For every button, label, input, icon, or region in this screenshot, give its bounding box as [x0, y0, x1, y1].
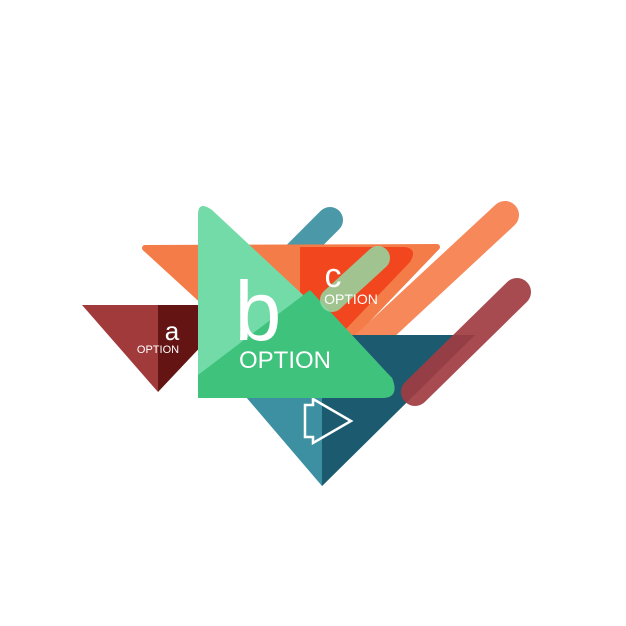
light green pill: [332, 258, 378, 300]
panel: green triangle option b: OPTION: [239, 347, 331, 374]
panel: teal triangle arrow: [193, 335, 475, 486]
label b: b: [235, 264, 281, 358]
panel: maroon triangle option a: OPTION: [137, 344, 179, 356]
icon: arrow: [305, 399, 351, 443]
panel: green triangle option b: [198, 206, 394, 398]
panel: maroon triangle option a: [82, 305, 240, 392]
red section: [300, 247, 413, 330]
label c: [324, 257, 378, 307]
dark red diagonal bar: [415, 292, 517, 392]
teal diagonal bar back: [230, 220, 330, 320]
label a: a: [165, 316, 180, 346]
label c: OPTION: [324, 291, 378, 307]
orange diagonal bar: [365, 215, 505, 345]
panel: orange triangle option c: [145, 247, 437, 390]
label c: c: [324, 257, 342, 295]
